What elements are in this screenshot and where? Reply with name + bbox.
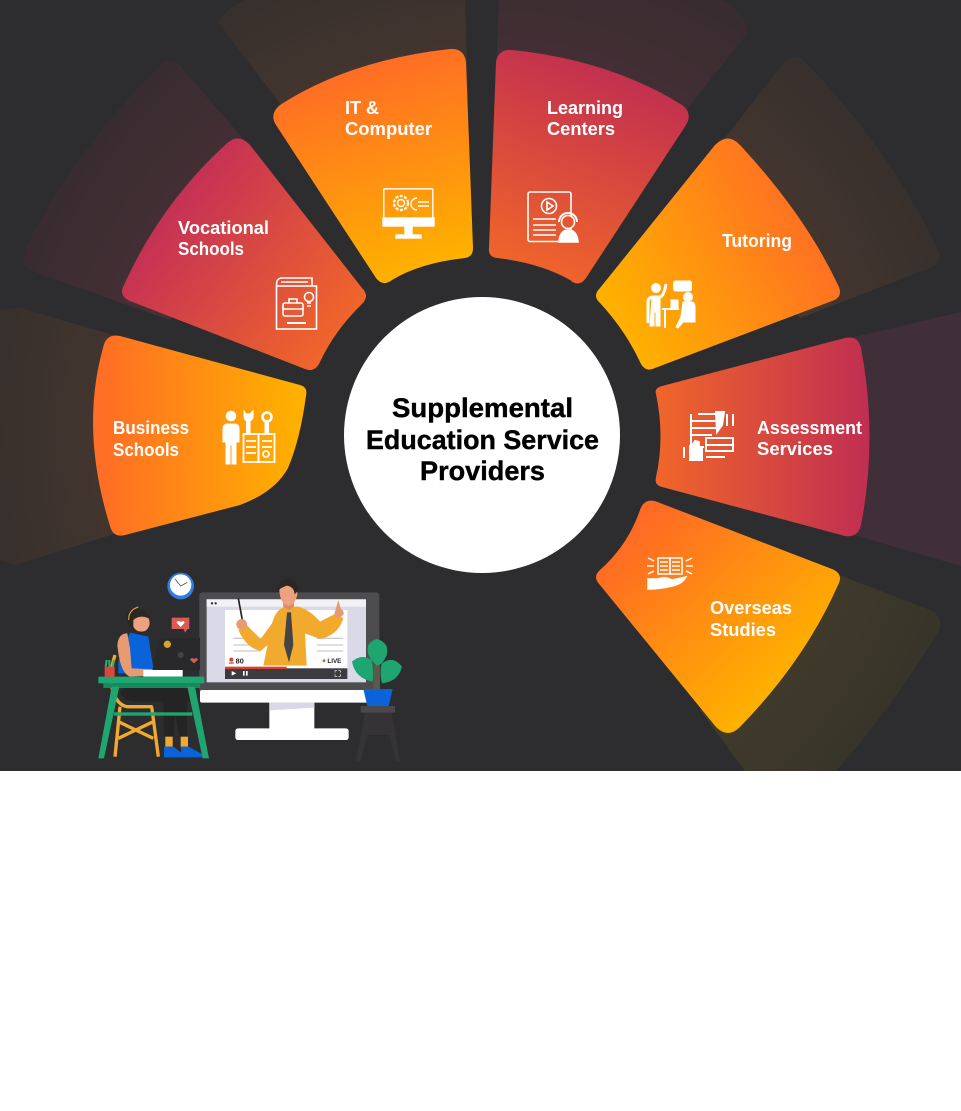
monitor: 80 <box>236 656 244 665</box>
label: IT & Computer: Computer <box>345 119 432 139</box>
icon: open book over hand <box>647 558 693 589</box>
panel: Tutoring <box>596 138 840 370</box>
icon: book with briefcase and lightbulb <box>276 278 316 329</box>
outer faded ring <box>0 0 961 771</box>
label: Vocational Schools: Vocational <box>178 218 269 238</box>
panel: Learning Centers <box>489 50 689 284</box>
icon: businessman, wrench, key and book <box>223 411 274 464</box>
heart speech bubble <box>172 618 189 633</box>
label: Assessment Services: Assessment <box>757 418 862 438</box>
icon: tutor and student at desk <box>648 281 695 328</box>
label: Business Schools: Business <box>113 418 189 438</box>
panel: Business Schools <box>93 336 306 536</box>
dark background <box>0 0 961 771</box>
label: Overseas Studies: Studies <box>710 620 776 640</box>
pencil cup <box>105 660 115 677</box>
label: Assessment Services: Services <box>757 439 833 459</box>
monitor <box>199 592 379 740</box>
teacher <box>236 579 344 666</box>
label: Tutoring: Tutoring <box>722 231 792 251</box>
label: Vocational Schools: Schools <box>178 239 244 259</box>
title: Providers <box>420 456 545 486</box>
center circle with title <box>344 297 620 573</box>
panel: Assessment Services <box>656 337 870 536</box>
icon: video tutorial tablet with support agent <box>528 192 578 242</box>
panel: IT & Computer <box>273 49 473 283</box>
label: Learning Centers: Learning <box>547 98 623 118</box>
label: Business Schools: Schools <box>113 440 179 460</box>
monitor: LIVE <box>327 658 341 665</box>
label: Overseas Studies: Overseas <box>710 598 792 618</box>
title: Supplemental <box>392 393 573 423</box>
panel: Vocational Schools <box>122 138 366 370</box>
icon: documents with thumbs up <box>684 412 733 460</box>
illustration: online class with teacher on monitor <box>98 573 402 762</box>
woman at desk <box>117 607 203 757</box>
title: Education Service <box>366 425 599 455</box>
chair <box>111 655 158 757</box>
panel: Overseas Studies <box>596 501 840 733</box>
label: IT & Computer: IT & <box>345 98 379 118</box>
clock <box>167 573 194 599</box>
stool with plant <box>352 639 402 762</box>
green desk <box>98 677 209 758</box>
icon: computer with gear and wrench <box>383 189 434 238</box>
label: Learning Centers: Centers <box>547 119 615 139</box>
